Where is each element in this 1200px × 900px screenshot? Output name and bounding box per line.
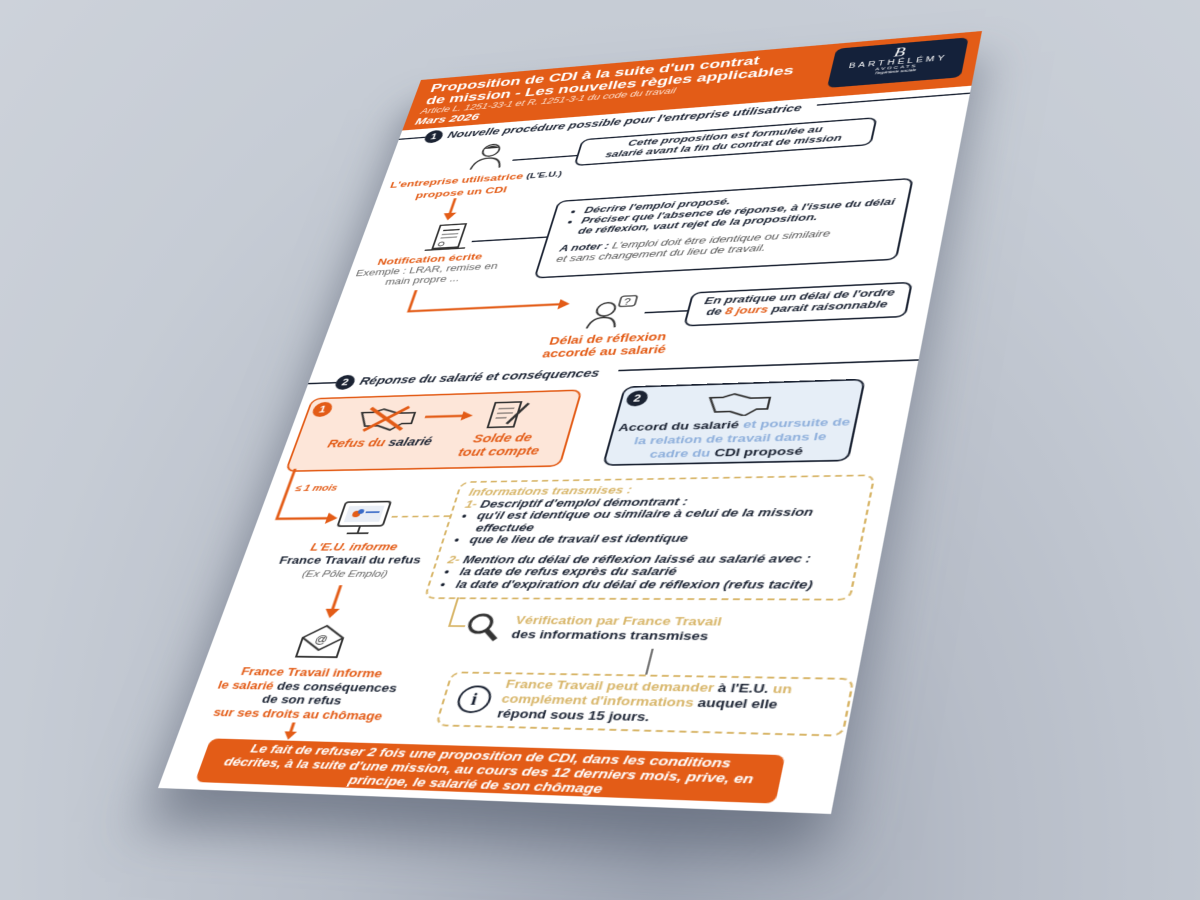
arrow [424,411,474,421]
arrow down 2 [288,470,343,618]
panel: complément d'informations [435,671,855,737]
panel: refus [285,389,583,472]
icon: handshake [470,392,772,418]
connector to verification [448,597,474,627]
icon: envelope: @ [313,634,329,645]
label: L'E.U. informe: France Travail du refus [278,553,423,566]
arrow down 1 [443,198,458,220]
connector line 3 [644,310,691,313]
label: notification: main propre ... [384,273,461,287]
connector vertical [645,649,654,675]
bubble 2: Décrire l'emploi proposé. [583,196,732,215]
logo [827,37,969,88]
arrow down 3 [284,722,298,740]
bubble 2: et sans changement du lieu de travail. [555,243,767,264]
text: vérification [510,613,723,643]
paper document [158,31,982,814]
badge 2 [625,390,650,407]
label: notification: Exemple : LRAR, remise en [354,261,499,278]
label: France Travail informe: sur ses droits au chômage [212,705,385,722]
elbow arrow 2 [274,468,338,524]
label: France Travail informe: de son refus [260,692,344,707]
panel: accord [602,379,866,466]
section 1 heading [398,92,970,144]
label: solde de tout compte: tout compte [457,444,541,459]
label: délai de réflexion: accordé au salarié [541,343,668,360]
badge 1: 1 [317,404,327,415]
label: solde de tout compte: Solde de [472,431,534,445]
label: France Travail informe: France Travail informe [239,665,384,680]
label: France Travail informe [212,665,399,723]
logo: B [893,45,907,59]
section 2 heading: Réponse du salarié et conséquences [358,367,601,387]
bubble 3 [683,282,913,327]
icon: signed document [486,401,530,428]
footer callout: Le fait de refuser 2 fois une proposition de CDI, dans les conditions décrites, à la suite d'une mission, au cours des 12 derniers mois, prive, en principe, le salarié de son chômage [222,741,755,796]
label: entreprise propose CDI: L'entreprise utilisatrice (L'E.U.) [389,170,563,190]
logo: l'ingénierie sociale [874,68,917,76]
bubble 2: A noter : L'emploi doit être identique ou similaire [558,228,831,254]
panel: informations transmises: • que le lieu de travail est identique [453,532,690,546]
bubble 3: de 8 jours parait raisonnable [705,299,889,317]
panel: informations transmises: effectuée [474,521,536,534]
section 2 heading [308,359,919,390]
label: entreprise propose CDI: propose un CDI [414,184,508,200]
label: notification: Notification écrite [376,251,484,267]
panel: informations transmises: Informations transmises : [467,483,633,498]
logo: AVOCATS [875,64,918,72]
dashed connector 1 [391,515,450,518]
title: Proposition de CDI à la suite d'un contrat [429,53,761,95]
text: accord: Accord du salarié et poursuite de la relation de travail dans le cadre du CDI proposé [617,415,851,460]
logo: BARTHÉLÉMY [848,55,948,70]
icon: person with question [586,294,638,330]
label: L'E.U. informe: L'E.U. informe [309,540,400,553]
label: notification [354,251,499,287]
panel: informations transmises: • la date de refus exprès du salarié [442,565,678,578]
label: L'E.U. informe: (Ex Pôle Emploi) [301,569,389,579]
icon: computer france travail [288,470,392,534]
icon: info: i [469,690,480,708]
panel: informations transmises: • la date d'expiration du délai de réflexion (refus tacite) [439,577,814,591]
badge 2: 2 [632,393,642,404]
icon: magnifier [467,613,498,642]
article reference: Article L. 1251-33-1 et R. 1251-3-1 du code du travail [419,86,677,116]
label: délai de réflexion [541,330,668,360]
label: France Travail informe: le salarié des conséquences [216,678,399,694]
label: solde de tout compte [457,431,541,459]
icon: person [469,144,502,170]
connector line 2 [472,236,549,242]
icon: person with question: ? [622,297,632,307]
bubble 3: En pratique un délai de l'ordre [703,287,896,306]
panel: complément d'informations: France Travail peut demander à l'E.U. un complément d'informations auquel elle répond sous 15 jours. [496,677,794,724]
bubble 1: salarié avant la fin du contrat de mission [604,133,843,159]
label: L'E.U. informe [278,470,423,579]
label: ≤ 1 mois: ≤ 1 mois [294,483,339,493]
icon: crossed handshake [360,405,416,432]
bubble 1: Cette proposition est formulée au [627,124,824,148]
section 1 heading: 1 [429,132,438,141]
elbow arrow [406,290,616,313]
panel: informations transmises: • qu'il est identique ou similaire à celui de la mission [460,505,815,522]
bubble 2: Préciser que l'absence de réponse, à l'issue du délai de réflexion, vaut rejet de la proposition. [577,197,896,236]
header [402,31,982,131]
connector line 1 [512,155,579,161]
panel: informations transmises [423,474,876,601]
badge 1 [310,402,334,417]
label: refus du salarié: Refus du salarié [326,435,434,450]
icon: document [424,223,468,251]
bubble 2 [534,178,914,279]
title: de mission - Les nouvelles règles applicables [424,63,795,107]
section 2 heading: 2 [340,377,350,388]
icon: envelope [294,624,344,658]
text: vérification: Vérification par France Travail [514,613,723,628]
text: vérification: des informations transmises [510,627,710,643]
panel: informations transmises: 2- Mention du délai de réflexion laissé au salarié avec : [446,551,813,565]
label: délai de réflexion: Délai de réflexion [548,330,668,347]
section 1 heading: Nouvelle procédure possible pour l'entreprise utilisatrice [446,102,803,140]
date: Mars 2026 [414,111,481,127]
label: entreprise propose CDI [389,170,563,200]
bubble 1 [573,117,878,166]
panel: informations transmises: 1- Descriptif d'emploi démontrant : [464,495,690,510]
icon: info [454,685,495,713]
